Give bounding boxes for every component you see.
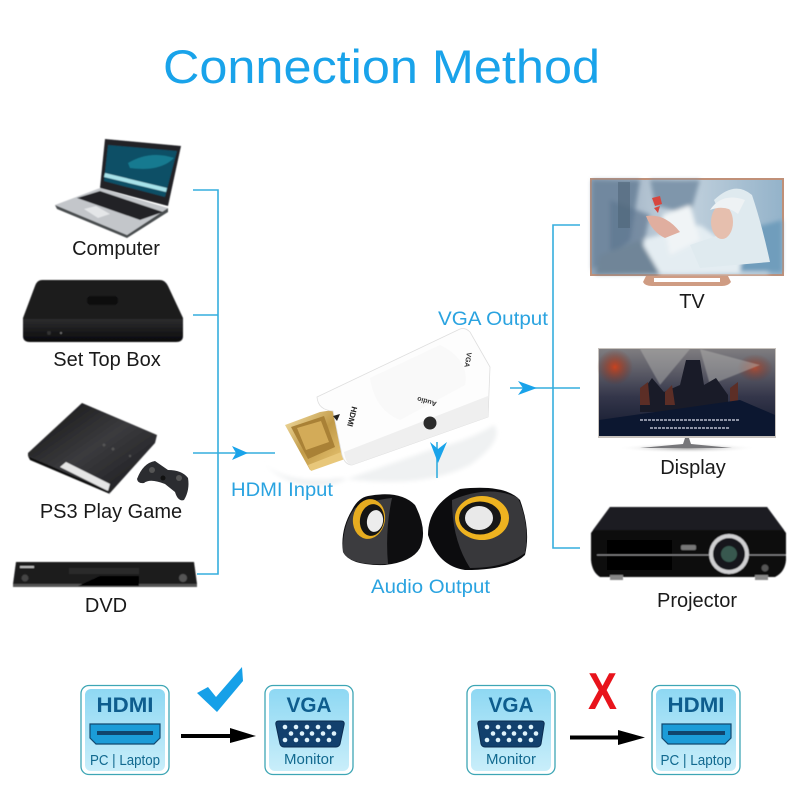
icon card: VGA monitor: VGA [286,694,332,717]
icon card: VGA monitor: Monitor [284,751,334,768]
adapter body [317,328,490,465]
icon: PS3 console [28,403,157,494]
label: projector: Projector [657,590,737,612]
label: PS3: PS3 Play Game [40,501,182,523]
left speaker [342,494,423,565]
icon card: HDMI target [652,686,740,774]
icon card: HDMI source: PC | Laptop [90,752,160,769]
connector: audio line with arrow [430,442,447,478]
connector: source bracket lines [193,190,275,574]
arrow: blocked direction [570,730,645,745]
title: Connection Method [163,40,600,93]
icon card: HDMI source [81,686,169,774]
label: DVD: DVD [85,595,127,617]
label: set top box: Set Top Box [53,349,161,371]
HDMI to VGA adapter [262,328,497,486]
connector: output bracket lines [510,225,580,548]
device: DVD [13,562,197,617]
label: computer: Computer [72,238,160,260]
adapter port label: VGA: VGA [462,352,472,368]
device: PS3 [28,403,188,523]
device: computer [55,139,181,260]
icon: game controller [137,461,188,500]
icon: projector [591,507,786,580]
speakers [342,488,527,570]
icon card: VGA source: VGA [488,694,534,717]
arrow: HDMI input [232,446,248,460]
icon card: HDMI target: PC | Laptop [660,752,732,769]
device: display [597,348,776,479]
icon card: HDMI source: HDMI [96,694,154,717]
device: set top box [23,280,183,371]
adapter shadow [262,425,497,486]
device: TV [590,178,784,313]
icon card: HDMI target: HDMI [668,694,724,717]
arrow: allowed direction [181,728,256,743]
red X mark: X [588,663,617,721]
label: display: Display [660,457,726,479]
check mark [197,667,243,712]
label: HDMI Input: HDMI Input [231,480,334,501]
adapter port label: Audio: Audio [417,395,438,407]
icon: TV [590,178,784,286]
marker: HDMI triangle [333,414,340,421]
label: VGA Output: VGA Output [438,309,549,330]
icon card: VGA source [467,686,555,774]
HDMI plug [285,410,345,471]
icon: set top box [23,280,183,342]
icon: DVD player [13,562,197,587]
audio jack [424,416,436,430]
label: Audio Output: Audio Output [371,577,491,598]
icon card: VGA source: Monitor [486,751,536,768]
icon card: VGA monitor [265,686,353,774]
device: projector [591,507,786,612]
arrow: VGA output [518,381,537,395]
icon: display [597,348,776,453]
icon: laptop [55,139,181,238]
right speaker [428,488,527,570]
label: TV: TV [679,291,705,313]
adapter port label: HDMI: HDMI [345,406,359,428]
